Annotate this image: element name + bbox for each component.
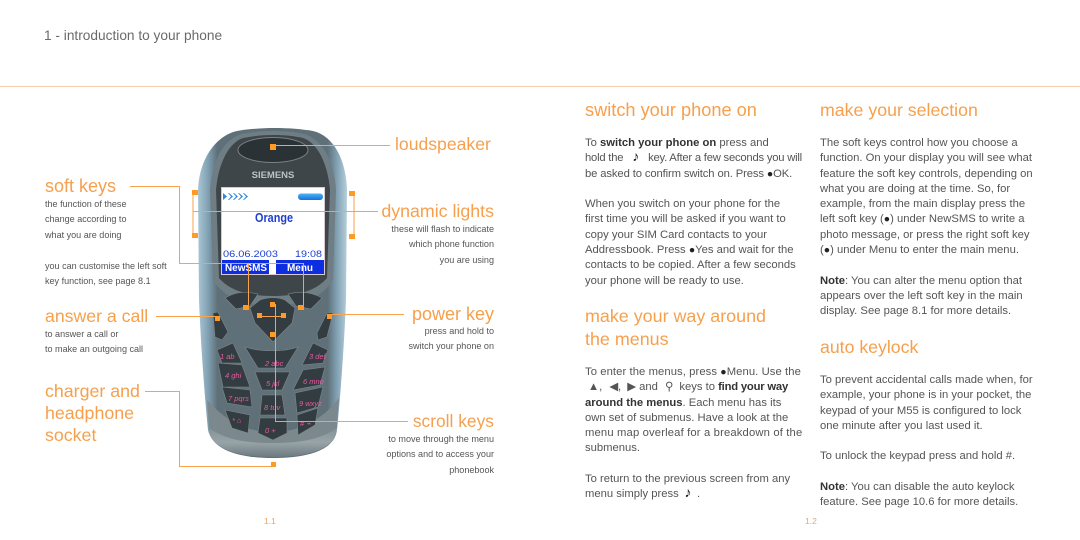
label: soft keys: soft keys [45,176,116,196]
label: charger and headphone socket [45,381,140,445]
column: make your way around the menus: ♪ [684,484,691,500]
label: charger and headphone socket: headphone [45,403,134,423]
label: charger and headphone socket: charger and [45,381,140,401]
column: make your way around the menus: To enter the menus, press ●Menu. Use the ▲, ◀, ▶ and ⚲ keys to find your way around the menus. Each menu has its own set of submenus. Have a look at the menu map overleaf for a breakdown of the submenus. To return to the previous screen from any menu simply press . [585,366,802,500]
phone illustration: 6 mno [303,377,324,386]
label: power key: power key [412,304,494,324]
phone illustration: 9 wxyz [299,399,322,408]
label: dynamic lights: which phone function [409,239,494,249]
label: loudspeaker: loudspeaker [395,134,491,154]
phone illustration: 0 + [265,426,276,435]
column: make your way around the menus [585,306,802,500]
screen: 06.06.2003 [223,249,278,260]
label: power key [408,304,494,351]
label: soft keys: the function of these [45,199,126,209]
label: dynamic lights: you are using [440,255,494,265]
label: scroll keys: scroll keys [413,411,494,431]
column: make your selection: The soft keys control how you choose a function. On your display you will see what feature the soft key controls, depending on what you are doing at the time. So, for example, from the main display press the left soft key (●) under NewSMS to write a photo message, or press the right soft key (●) under Menu to enter the main menu. Note: You can alter the menu option that appears over the left soft key in the main display. See page 8.1 for more details. [820,137,1033,317]
screen: Menu [287,263,313,274]
brand: SIEMENS [252,170,294,181]
page number left: 1.1 [264,516,276,526]
column: make your way around the menus: the menus [585,329,669,349]
label: scroll keys [386,411,494,475]
label: power key: press and hold to [425,326,494,336]
keypad [213,292,333,440]
column: switch your phone on: switch your phone on [585,100,757,120]
label: soft keys: change according to [45,214,126,224]
phone illustration: 2 abc [264,359,284,368]
label: scroll keys: phonebook [449,465,494,475]
phone illustration: 5 jkl [266,379,280,388]
label: soft keys: you can customise the left soft [45,261,167,271]
screen: NewSMS [225,263,267,274]
label: answer a call: to make an outgoing call [45,344,143,354]
callout lines and markers [130,146,408,466]
label: answer a call: to answer a call or [45,329,118,339]
screen [222,188,324,274]
column: make your way around the menus: make your way around [585,306,766,326]
label: answer a call [45,306,148,354]
page number right: 1.2 [805,516,817,526]
phone illustration: 1 ab [220,352,235,361]
section heading: 1 - introduction to your phone [44,28,222,43]
phone illustration: 7 pqrs [228,394,249,403]
label: dynamic lights: these will flash to indicate [391,224,494,234]
screen: Orange [255,210,293,225]
label: charger and headphone socket: socket [45,425,96,445]
phone illustration: 8 tuv [264,403,282,412]
label: soft keys: what you are doing [45,230,121,240]
label: soft keys: key function, see page 8.1 [45,276,151,286]
phone illustration: * ⌂ [232,416,242,425]
screen: 19:08 [295,249,322,260]
column: auto keylock: To prevent accidental calls made when, for example, your phone is in your pocket, the keypad of your M55 is configured to lock one minute after you last used it. To unlock the keypad press and hold #. Note: You can disable the auto keylock feature. See page 10.6 for more details. [820,374,1033,508]
phone illustration: 4 ghi [225,371,242,380]
column: make your selection: make your selection [820,100,978,120]
label: answer a call: answer a call [45,306,148,326]
column: switch your phone on: ♪ [632,148,639,164]
phone illustration: 3 def [309,352,327,361]
label: scroll keys: to move through the menu [388,434,494,444]
label: power key: switch your phone on [408,341,494,351]
label: scroll keys: options and to access your [386,449,494,459]
label: dynamic lights: dynamic lights [381,201,494,221]
column: switch your phone on: To switch your phone on press and hold the key. After a few seconds you will be asked to confirm switch on. Press ●OK. When you switch on your phone for the first time you will be asked if you want to copy your SIM Card contacts to your Addressbook. Press ●Yes and wait for the contacts to be copied. After a few seconds your phone will be ready to use. [585,137,802,287]
label: dynamic lights [381,201,494,265]
phone illustration: # ⌁ [300,419,311,428]
column: auto keylock: auto keylock [820,337,918,357]
label: soft keys [45,176,167,286]
